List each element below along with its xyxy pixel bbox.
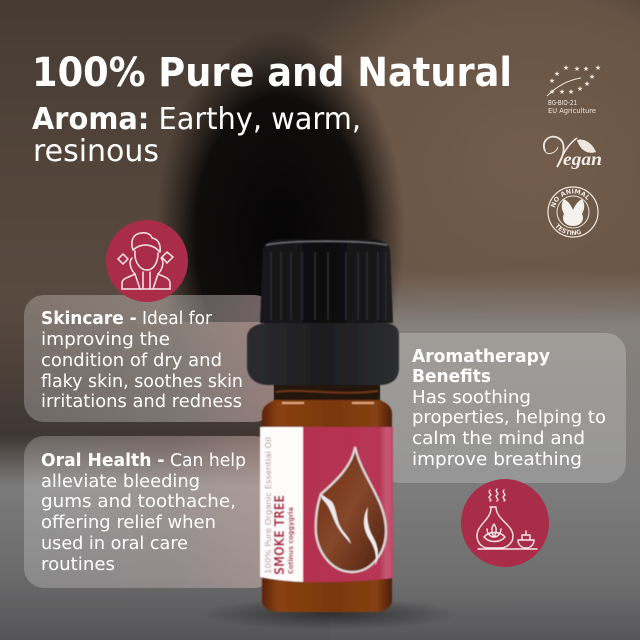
bottle: label text: 100% Pure Organic Essential Oil	[264, 437, 273, 574]
bottle: label text: Cotinus coggygria	[287, 507, 295, 574]
bottle	[247, 239, 399, 612]
certification: EU organic leaf: ★	[563, 64, 569, 72]
certification: EU organic leaf: ★	[549, 77, 555, 85]
panel: skincare: flaky skin, soothes skin	[41, 372, 243, 392]
bottle: collar	[247, 323, 399, 385]
bottle: label text	[264, 437, 295, 575]
panel: aromatherapy: Has soothing	[412, 388, 531, 408]
panel: aromatherapy: calm the mind and	[412, 429, 585, 449]
certification: EU organic leaf: ★	[584, 80, 590, 88]
bottle: neck	[274, 384, 380, 403]
certification: no animal testing: TESTING	[556, 223, 582, 236]
panel: aromatherapy: Aromatherapy	[412, 347, 551, 367]
certification: vegan: egan	[563, 149, 602, 169]
panel: aromatherapy	[380, 333, 626, 483]
panel: oral health	[24, 436, 274, 588]
bottle: drop emblem	[316, 447, 386, 572]
certification: EU organic leaf: ★	[568, 88, 574, 96]
panel: skincare: condition of dry and	[41, 351, 222, 371]
icon: aromatherapy	[461, 479, 549, 567]
certification: EU organic leaf: BG-BIO-21	[548, 98, 577, 107]
panel: aromatherapy: improve breathing	[412, 450, 582, 470]
aroma subtitle: resinous	[33, 134, 159, 169]
certification: EU organic leaf: ★	[554, 70, 560, 78]
panel: skincare: improving the	[41, 330, 170, 350]
panel: skincare: Skincare - Ideal for	[41, 309, 213, 329]
certification: EU organic leaf: ★	[577, 85, 583, 93]
bottle: amber glass body	[262, 398, 392, 612]
panel: aromatherapy: properties, helping to	[412, 408, 606, 428]
panel: oral health: used in oral care	[41, 534, 188, 554]
panel: skincare	[24, 295, 274, 422]
bottle: label text: SMOKE TREE	[273, 495, 288, 575]
aroma subtitle: Aroma: Earthy, warm,	[32, 102, 361, 137]
certification: EU organic leaf	[547, 64, 601, 115]
bottle: ribbed cap	[260, 239, 393, 323]
panel: oral health: gums and toothache,	[41, 492, 236, 512]
bottle: label white strip	[260, 427, 304, 582]
panel: oral health: offering relief when	[41, 513, 216, 533]
certification: EU organic leaf: EU Agriculture	[548, 106, 596, 115]
certification: no animal testing: NO ANIMAL	[550, 188, 589, 208]
certification: EU organic leaf: ★	[549, 88, 555, 96]
aroma subtitle	[32, 102, 361, 169]
panel: aromatherapy: Benefits	[412, 367, 491, 387]
panel: oral health: alleviate bleeding	[41, 472, 200, 492]
panel: oral health: Oral Health - Can help	[41, 451, 246, 471]
certification: no animal testing	[547, 186, 599, 238]
certification: EU organic leaf: ★	[595, 64, 601, 72]
icon: skincare	[106, 220, 188, 302]
certification: vegan	[544, 137, 602, 169]
title: 100% Pure and Natural	[32, 50, 512, 96]
bottle: label red area	[303, 427, 393, 582]
panel: skincare: irritations and redness	[41, 392, 242, 412]
certification: EU organic leaf: ★	[589, 73, 595, 81]
panel: oral health: routines	[41, 555, 115, 575]
certification: EU organic leaf: ★	[574, 65, 580, 73]
certification: EU organic leaf: ★	[583, 65, 589, 73]
certification: EU organic leaf: ★	[559, 88, 565, 96]
